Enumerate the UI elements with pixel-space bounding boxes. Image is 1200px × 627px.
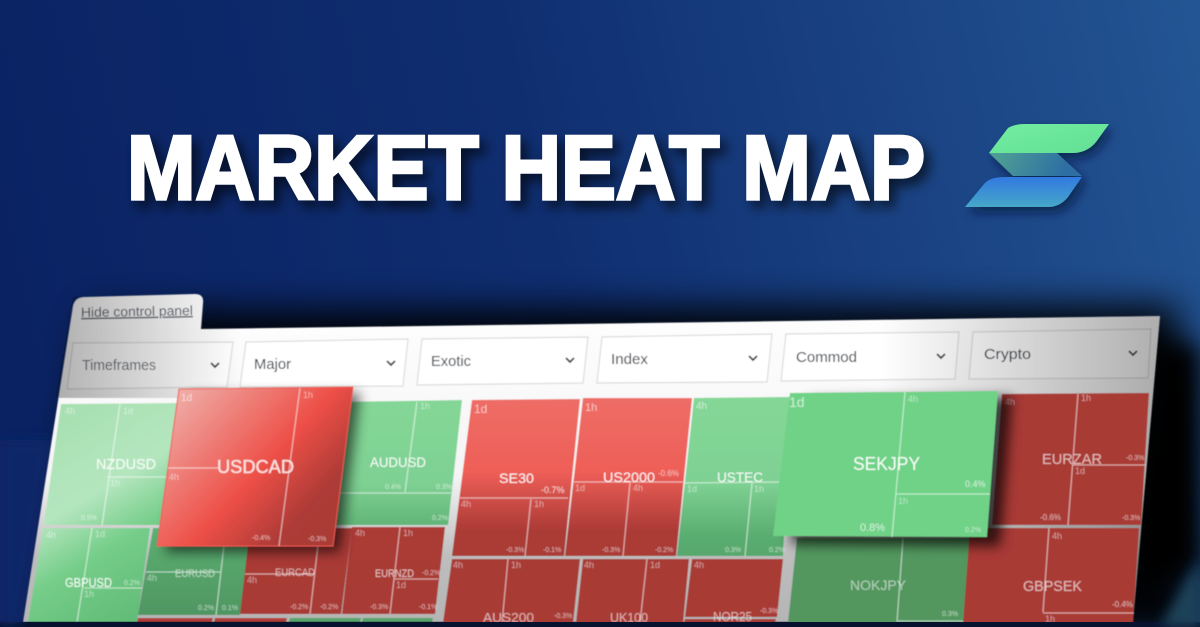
tile: SE30: 1d [474,402,487,416]
tile: GBPSEK: 4h [1052,531,1062,541]
tile: SE30: -0.1% [543,547,561,554]
card shadow: SEKJPY [790,397,1012,546]
tile: GBPUSD: 4h [46,530,56,540]
tile: US2000: 1d [575,483,585,493]
tile: SE30: 1h [534,499,544,509]
card: SEKJPY: 0.2% [965,527,981,534]
tile: USTEC [677,397,790,556]
card: USDCAD [157,387,353,546]
tile: GBPSEK: GBPSEK [1023,578,1082,595]
tile: EURCAD: -0.2% [290,604,308,611]
tile: AUDUSD: 0.4% [385,484,401,491]
tile: EURCAD: EURCAD [275,567,315,579]
heat map panel [23,293,1160,625]
tile: EURUSD: 0.1% [222,605,238,612]
tile: AUS200 [443,559,580,625]
panel body [23,294,1160,622]
tile: US2000: 4h [633,483,643,493]
tile: EURZAR: EURZAR [1042,451,1102,468]
tile: EURZAR: -0.3% [1126,455,1144,462]
tile: EURZAR: -0.3% [1122,515,1140,522]
dropdown: Exotic: Exotic [431,354,471,370]
tile: EURNZD: -0.1% [419,604,437,611]
tile: EURZAR: -0.6% [1040,513,1061,522]
card: SEKJPY: 0.4% [965,479,986,489]
tile: GBPSEK: 1h [1045,614,1055,624]
dropdown: Index [597,334,772,383]
tile: AUDUSD: AUDUSD [370,454,426,470]
tile: EURZAR: 1d [1075,466,1085,476]
tile: UK100: UK100 [610,610,648,625]
tile: NOR25: NOR25 [713,609,752,624]
tile: EURNZD: -0.2% [422,570,440,577]
card: SEKJPY: 1h [898,496,908,506]
tile: EURNZD: -0.3% [370,604,388,611]
card: SEKJPY: 1d [789,394,805,410]
tile: SE30: 4h [461,499,471,509]
tile: GBPUSD: GBPUSD [65,575,112,590]
tile: US2000: US2000 [603,469,655,485]
tile: GBPUSD: 1d [95,529,105,539]
title: MARKET HEAT MAP [127,118,925,219]
tile: SE30: SE30 [499,470,534,486]
tile: NZDUSD: 4h [65,406,75,416]
tile: EURNZD: 1h [403,528,413,538]
dropdown: Crypto: Crypto [984,347,1031,363]
tile: NZDUSD: 0.5% [81,515,97,522]
card: USDCAD: 1h [303,390,313,400]
dropdown: Index: Index [611,352,649,368]
tile: US2000 [565,398,692,556]
tile: UK100: 1d [650,560,660,570]
panel shading [23,293,1160,622]
tile: NOKJPY: NOKJPY [850,577,907,593]
tile: NOKJPY: 0.3% [942,611,958,618]
tile: NZDUSD: 1d [123,406,133,416]
tile: UK100 [576,559,689,625]
card: SEKJPY: SEKJPY [853,453,920,474]
logo [965,124,1109,207]
dropdown: Major [240,339,408,387]
tile: EURCAD: 4h [247,575,257,585]
tile: NOR25: 4h [694,560,704,570]
tile: NOKJPY [788,538,970,623]
card: USDCAD: 1d [181,393,192,404]
tile: AUS200: AUS200 [483,610,534,625]
card: USDCAD: -0.4% [252,535,270,542]
tile: GBPSEK: -0.4% [1112,600,1133,609]
tile: EURCAD [240,528,352,614]
tile: US2000: -0.3% [602,547,620,554]
panel shadow [0,305,1200,627]
tile: EURUSD [138,528,252,615]
dropdown: Major: Major [254,357,291,373]
tile: GBPUSD: 0.2% [124,580,140,587]
tile: USTEC: 0.3% [725,547,741,554]
card: USDCAD: 4h [169,472,179,482]
tile: AUS200: 4h [453,560,463,570]
tile: EURUSD: 0.2% [198,605,214,612]
tile: EURNZD: EURNZD [375,568,414,580]
tile: GBPSEK [963,528,1139,624]
tile: GBPUSD: 1h [84,589,94,599]
tile: US2000: -0.6% [658,469,679,478]
tile: NZDUSD [44,403,190,525]
tile: AUS200: -0.3% [554,613,572,620]
tile: AUDUSD [336,400,462,526]
card: SEKJPY: 0.8% [860,522,885,534]
tile: EURUSD: 4h [147,573,157,583]
tile: NZDUSD: NZDUSD [96,456,156,473]
tile: AUDUSD: 0.3% [436,484,452,491]
tile: AUDUSD: 0.2% [432,515,448,522]
bottom tile strip [137,618,433,622]
tile: EURNZD: 4h [355,528,365,538]
tile: SE30: -0.3% [506,547,524,554]
tile: SE30 [452,399,580,556]
card: SEKJPY [773,391,998,537]
dropdown: Commod [781,332,959,381]
tab label: Hide control panel [81,303,193,320]
dropdown: Exotic [417,337,588,385]
tile: USTEC: 1h [754,484,764,494]
tile: AUS200: 1h [511,560,521,570]
tile: USTEC: 4h [696,401,707,412]
tile: EURZAR [992,393,1149,525]
tile: USTEC: 1d [687,484,697,494]
tile: EURZAR: 1h [1081,393,1091,403]
tile: NZDUSD: 1h [110,478,120,488]
tile: NOR25: -0.3% [760,608,778,615]
tile: EURCAD: -0.2% [320,604,338,611]
tile: EURNZD: 1d [396,580,406,590]
dropdown: Timeframes [67,342,233,389]
tile: US2000: -0.2% [655,547,673,554]
tile: AUDUSD: 1h [420,401,430,411]
dropdown: Timeframes: Timeframes [82,358,156,374]
card: USDCAD: -0.3% [308,536,326,543]
card: SEKJPY: 4h [908,394,918,404]
dropdown: Commod: Commod [796,350,857,366]
tile: EURNZD [342,527,445,614]
tile: USTEC: 0.2% [769,547,785,554]
card: USDCAD: USDCAD [217,457,294,477]
dropdown: Crypto [969,329,1151,379]
card shadow: USDCAD [165,393,360,552]
tile: US2000: 1h [585,402,597,414]
tile: GBPUSD [28,528,150,622]
tile: UK100: 4h [584,560,594,570]
tile: EURUSD: EURUSD [175,568,215,580]
tile: NOR25 [684,559,783,624]
tile: EURZAR: 4h [1005,397,1015,407]
tile: SE30: -0.7% [541,485,565,495]
tile: USTEC: USTEC [717,469,763,485]
